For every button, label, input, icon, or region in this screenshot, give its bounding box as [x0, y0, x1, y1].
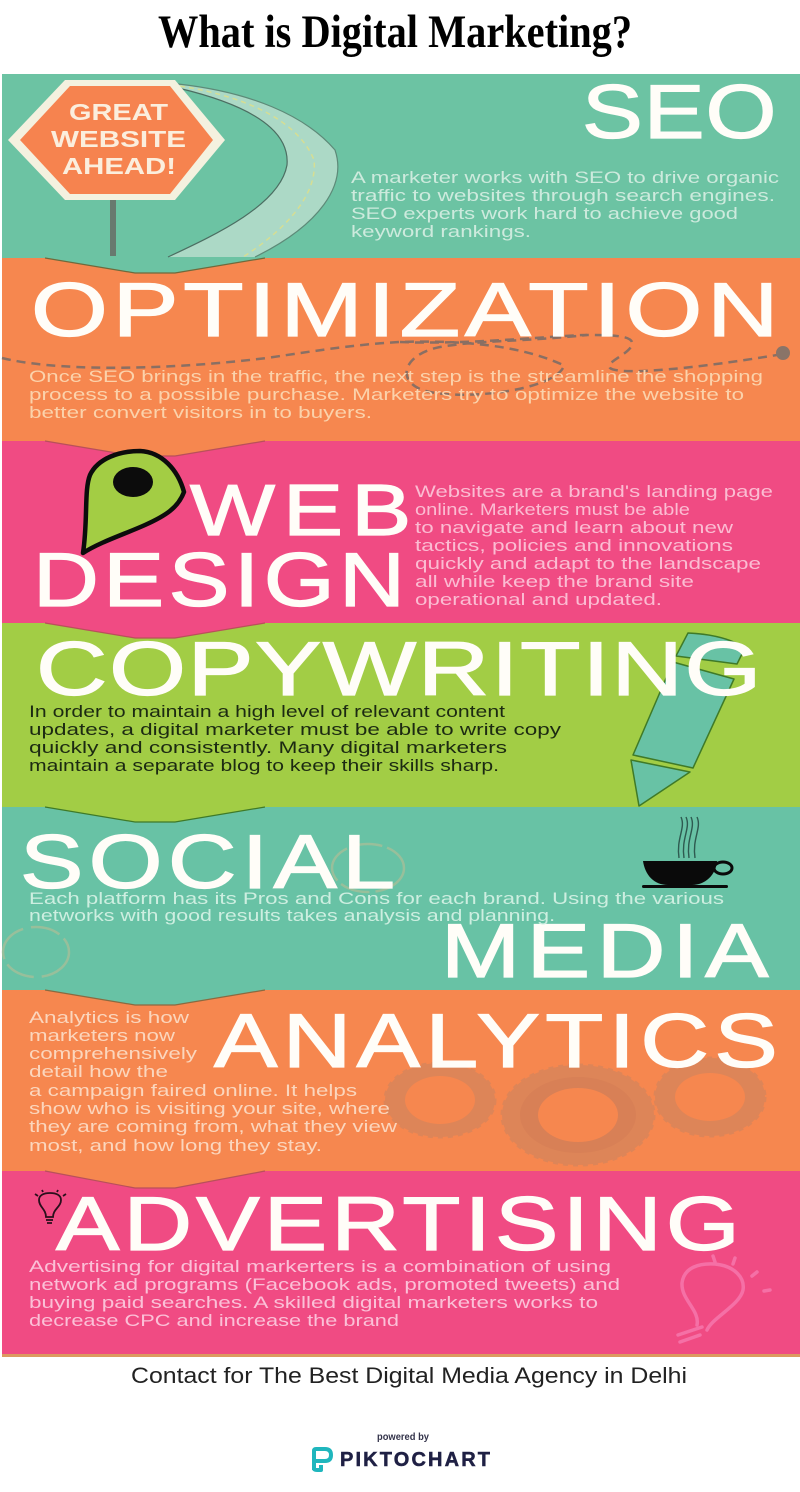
text: SEO description: traffic to websites through search engines.	[351, 187, 775, 205]
text: Web Design description: operational and updated.	[415, 591, 662, 609]
text: Optimization description: better convert visitors in to buyers.	[29, 404, 372, 422]
heading: Social: SOCIAL	[20, 820, 395, 905]
icon: coffee cup	[642, 817, 732, 888]
icon: road sign	[8, 80, 225, 256]
icon: pencil	[631, 633, 745, 806]
text: Copywriting description: quickly and consistently. Many digital marketers	[29, 739, 507, 757]
text: Web Design description: Websites are a brand's landing page	[415, 483, 773, 501]
text: Advertising description: buying paid searches. A skilled digital marketers works to	[29, 1294, 598, 1312]
text: Analytics description: Analytics is how	[29, 1009, 189, 1027]
panel: SEO	[2, 69, 800, 258]
icon: road sign: WEBSITE	[51, 126, 186, 152]
dashed route	[2, 335, 783, 395]
heading: Media: MEDIA	[441, 909, 769, 994]
text: Optimization description: process to a possible purchase. Marketers try to optimize the website to	[29, 386, 744, 404]
text: Copywriting description: maintain a separate blog to keep their skills sharp.	[29, 757, 499, 775]
text: SEO description	[351, 169, 779, 241]
text: Optimization description	[29, 368, 763, 422]
icon: road	[168, 84, 338, 257]
icon: small light bulb	[35, 1190, 66, 1223]
text: Web Design description: online. Marketers must be able	[415, 501, 690, 519]
text: Social Media description: networks with good results takes analysis and planning.	[29, 907, 555, 925]
heading: Analytics: ANALYTICS	[214, 999, 778, 1084]
bottom strip	[2, 1354, 800, 1357]
panel: Copywriting	[2, 623, 800, 807]
panel: Optimization	[2, 258, 800, 441]
heading: Optimization: OPTIMIZATION	[31, 267, 778, 352]
text: Analytics description: they are coming from, what they view	[29, 1118, 397, 1136]
text: Advertising description	[29, 1258, 620, 1330]
text: Web Design description	[415, 483, 773, 609]
text: Social Media description: Each platform has its Pros and Cons for each brand. Using the various	[29, 890, 724, 908]
heading: Design: DESIGN	[33, 537, 405, 622]
text: Social Media description	[29, 890, 724, 925]
text: Analytics description: detail how the	[29, 1063, 168, 1081]
heading: Advertising: ADVERTISING	[56, 1182, 740, 1267]
icon: road sign: AHEAD!	[62, 153, 176, 179]
text: Advertising description: Advertising for digital markerters is a combination of using	[29, 1258, 611, 1276]
text: Analytics description: most, and how long they stay.	[29, 1137, 322, 1155]
icon: faint large light bulb	[678, 1256, 770, 1342]
panel: Web Design	[2, 441, 800, 623]
panel: Analytics	[2, 990, 800, 1171]
text: SEO description: A marketer works with SEO to drive organic	[351, 169, 779, 187]
text: Optimization description: Once SEO brings in the traffic, the next step is the streamline the shopping	[29, 368, 763, 386]
text: Web Design description: all while keep the brand site	[415, 573, 694, 591]
text: Advertising description: decrease CPC and increase the brand	[29, 1312, 399, 1330]
icon: Piktochart logo	[314, 1449, 331, 1470]
text: Web Design description: quickly and adapt to the landscape	[415, 555, 761, 573]
text: Web Design description: tactics, policies and innovations	[415, 537, 733, 555]
panel: Advertising	[2, 1171, 800, 1355]
route end dot	[776, 346, 790, 360]
text: Advertising description: network ad programs (Facebook ads, promoted tweets) and	[29, 1276, 620, 1294]
heading: SEO: SEO	[582, 69, 776, 154]
text: Copywriting description	[29, 703, 562, 775]
icon: gears	[385, 1058, 765, 1165]
text: SEO description: keyword rankings.	[351, 223, 531, 241]
icon: map pin	[83, 451, 184, 553]
text: Web Design description: to navigate and learn about new	[415, 519, 733, 537]
panel: Social Media	[2, 807, 800, 994]
text: Analytics description	[29, 1009, 397, 1155]
text: Copywriting description: updates, a digital marketer must be able to write copy	[29, 721, 562, 739]
heading: Copywriting: COPYWRITING	[36, 626, 761, 711]
text: Analytics description: show who is visiting your site, where	[29, 1100, 390, 1118]
text: Analytics description: comprehensively	[29, 1045, 198, 1063]
text: Copywriting description: In order to maintain a high level of relevant content	[29, 703, 506, 721]
title: What is Digital Marketing?	[158, 6, 632, 58]
decorative rings	[3, 844, 404, 977]
heading: Web: WEB	[190, 471, 411, 551]
icon: road sign: GREAT	[69, 99, 168, 125]
powered by: powered by	[377, 1432, 429, 1443]
contact line: Contact for The Best Digital Media Agency in Delhi	[131, 1363, 687, 1388]
text: SEO description: SEO experts work hard to achieve good	[351, 205, 738, 223]
Piktochart wordmark: PIKTOCHART	[340, 1449, 490, 1471]
text: Analytics description: a campaign faired online. It helps	[29, 1082, 357, 1100]
text: Analytics description: marketers now	[29, 1027, 175, 1045]
